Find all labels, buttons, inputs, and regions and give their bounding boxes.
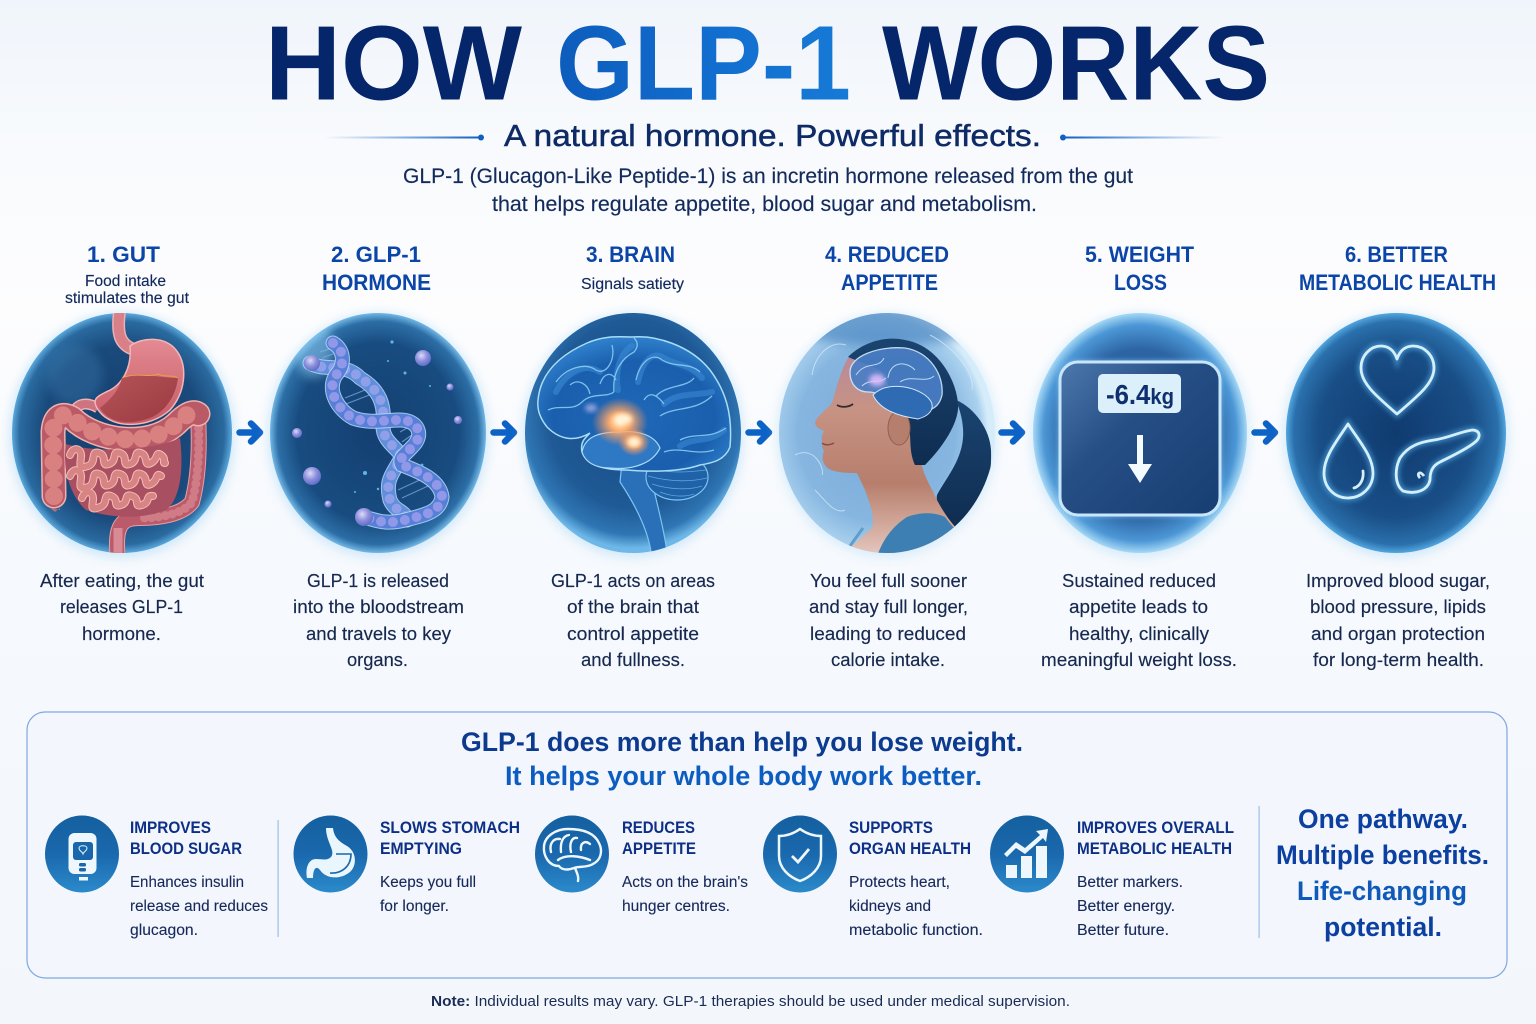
benefit text: METABOLIC HEALTH xyxy=(1077,840,1232,858)
step 3 description: and fullness. xyxy=(581,650,685,670)
step 1: gut xyxy=(9,242,235,644)
step 3 description: GLP-1 acts on areas xyxy=(551,571,715,591)
step 6 description xyxy=(1306,571,1490,670)
step 1 heading: Food intake xyxy=(85,273,166,290)
small intestine xyxy=(65,438,181,517)
icon: brain xyxy=(535,816,609,892)
esophagus and stomach xyxy=(74,308,184,424)
step 4: reduced appetite xyxy=(776,242,998,670)
icon: stomach xyxy=(294,816,368,892)
closing statement: Life-changing xyxy=(1297,876,1467,906)
step 5 description: appetite leads to xyxy=(1069,597,1208,617)
closing statement: One pathway. xyxy=(1298,804,1468,834)
step 4 heading xyxy=(825,242,949,295)
step 4 description: leading to reduced xyxy=(810,624,966,644)
step 3 heading xyxy=(581,242,684,293)
illustration: scale with reading: -6.4kg xyxy=(1106,379,1174,410)
step 1 description: hormone. xyxy=(82,624,161,644)
benefit text: kidneys and xyxy=(849,898,931,915)
step 4 description xyxy=(809,571,968,670)
title: GLP-1 xyxy=(556,4,851,122)
step 4 heading: APPETITE xyxy=(841,270,938,295)
step 5 description: healthy, clinically xyxy=(1069,624,1209,644)
step 1 heading xyxy=(65,242,190,307)
step 2 description: GLP-1 is released xyxy=(307,571,449,591)
title xyxy=(265,4,1270,122)
ponytail xyxy=(937,400,991,530)
benefit text: REDUCES xyxy=(622,819,695,837)
subtitle with flanking lines xyxy=(325,118,1224,153)
shirt xyxy=(878,513,954,553)
face and neck xyxy=(815,358,955,553)
benefit text: Better markers. xyxy=(1077,874,1183,891)
arrow 5 xyxy=(1254,424,1275,442)
benefit text xyxy=(849,819,983,939)
step 3: brain xyxy=(522,242,744,670)
step 2 description xyxy=(293,571,464,670)
step 5 heading: 5. WEIGHT xyxy=(1085,242,1194,267)
step 3 description xyxy=(551,571,715,670)
benefit text: IMPROVES OVERALL xyxy=(1077,819,1234,837)
illustration: scale with reading xyxy=(1030,312,1250,558)
step 1 description: After eating, the gut xyxy=(40,571,204,591)
benefit text: SLOWS STOMACH xyxy=(380,819,520,837)
benefit text: BLOOD SUGAR xyxy=(130,840,242,858)
step 6 description: blood pressure, lipids xyxy=(1310,597,1486,617)
step 1 heading: stimulates the gut xyxy=(65,290,190,307)
benefit: slows stomach emptying xyxy=(294,816,520,915)
step 1 heading: 1. GUT xyxy=(87,242,160,267)
step 2 description: into the bloodstream xyxy=(293,597,464,617)
step 6 heading: 6. BETTER xyxy=(1345,242,1448,267)
subtitle with flanking lines: A natural hormone. Powerful effects. xyxy=(504,118,1041,153)
step 5 description xyxy=(1041,571,1237,670)
icon: glucose meter xyxy=(45,816,119,892)
benefit text: for longer. xyxy=(380,898,449,915)
benefit text: Better energy. xyxy=(1077,898,1175,915)
benefit text: APPETITE xyxy=(622,840,696,858)
step 6 description: and organ protection xyxy=(1311,624,1485,644)
benefit text: Keeps you full xyxy=(380,874,476,891)
illustration: heart, drop and pancreas outlines xyxy=(1283,312,1509,558)
benefit text xyxy=(130,819,268,939)
arrow 2 xyxy=(494,424,514,442)
step 2 description: organs. xyxy=(347,650,408,670)
brain overlay xyxy=(850,348,942,411)
step 5 heading: LOSS xyxy=(1114,270,1167,295)
step 6: metabolic health xyxy=(1283,242,1509,670)
benefit text: Acts on the brain's xyxy=(622,874,748,891)
closing statement: potential. xyxy=(1324,912,1442,942)
illustration: woman in profile with brain xyxy=(776,298,998,560)
arrow 4 xyxy=(1002,424,1022,442)
benefit text: Protects heart, xyxy=(849,874,950,891)
step 6 description: for long-term health. xyxy=(1313,650,1484,670)
step 2 heading xyxy=(322,242,431,295)
step 5 heading xyxy=(1085,242,1194,295)
closing statement xyxy=(1276,804,1489,942)
step 6 heading: METABOLIC HEALTH xyxy=(1299,270,1496,295)
benefit text: IMPROVES xyxy=(130,819,211,837)
intro text: that helps regulate appetite, blood sugar and metabolism. xyxy=(492,193,1037,216)
benefit: improves blood sugar xyxy=(45,816,268,939)
panel heading xyxy=(461,727,1023,791)
arrow 3 xyxy=(748,424,769,442)
step 5 description: Sustained reduced xyxy=(1062,571,1216,591)
benefit: reduces appetite xyxy=(535,816,748,915)
benefit text: ORGAN HEALTH xyxy=(849,840,971,858)
ear xyxy=(888,411,910,445)
intro text: GLP-1 (Glucagon-Like Peptide-1) is an incretin hormone released from the gut xyxy=(403,165,1133,188)
benefit text: SUPPORTS xyxy=(849,819,933,837)
step 1 description: releases GLP-1 xyxy=(60,597,183,617)
step 4 description: calorie intake. xyxy=(831,650,945,670)
icon: rising chart xyxy=(990,816,1064,892)
illustration: digestive system xyxy=(9,308,235,560)
large intestine xyxy=(50,413,199,560)
step 5 description: meaningful weight loss. xyxy=(1041,650,1237,670)
benefit text xyxy=(380,819,520,915)
step 3 description: control appetite xyxy=(567,624,699,644)
benefit: improves overall metabolic health xyxy=(990,816,1234,939)
title: HOW xyxy=(265,4,522,122)
title: WORKS xyxy=(882,4,1270,122)
benefit text: glucagon. xyxy=(130,922,198,939)
footnote: Note: Individual results may vary. GLP-1 therapies should be used under medical supervision. xyxy=(431,993,1070,1010)
step 4 description: You feel full sooner xyxy=(810,571,967,591)
benefit text: EMPTYING xyxy=(380,840,462,858)
illustration: brain with glowing centre xyxy=(522,312,744,560)
step 2 heading: HORMONE xyxy=(322,270,431,295)
step 4 description: and stay full longer, xyxy=(809,597,968,617)
step 3 description: of the brain that xyxy=(567,597,699,617)
icon: shield with check xyxy=(763,816,837,892)
arrow 1 xyxy=(240,424,260,442)
hair xyxy=(848,339,958,465)
step 1 description xyxy=(40,571,204,644)
benefit text xyxy=(622,819,748,915)
step 3 heading: Signals satiety xyxy=(581,276,684,293)
benefit text: release and reduces xyxy=(130,898,268,915)
step 3 heading: 3. BRAIN xyxy=(586,242,675,267)
benefit text: Better future. xyxy=(1077,922,1169,939)
step 5: weight loss xyxy=(1030,242,1250,670)
step 6 description: Improved blood sugar, xyxy=(1306,571,1490,591)
step 2 heading: 2. GLP-1 xyxy=(331,242,421,267)
benefit text xyxy=(1077,819,1234,939)
benefit text: metabolic function. xyxy=(849,922,983,939)
benefit: supports organ health xyxy=(763,816,983,939)
panel heading: It helps your whole body work better. xyxy=(505,761,982,791)
closing statement: Multiple benefits. xyxy=(1276,840,1489,870)
benefit text: Enhances insulin xyxy=(130,874,244,891)
panel: benefits xyxy=(27,712,1507,978)
step 2 description: and travels to key xyxy=(306,624,451,644)
benefit text: hunger centres. xyxy=(622,898,730,915)
step 6 heading xyxy=(1299,242,1496,295)
step 4 heading: 4. REDUCED xyxy=(825,242,949,267)
intro text xyxy=(403,165,1133,216)
step 2: hormone xyxy=(267,242,489,670)
panel heading: GLP-1 does more than help you lose weight. xyxy=(461,727,1023,757)
illustration: peptide helix xyxy=(267,312,489,558)
